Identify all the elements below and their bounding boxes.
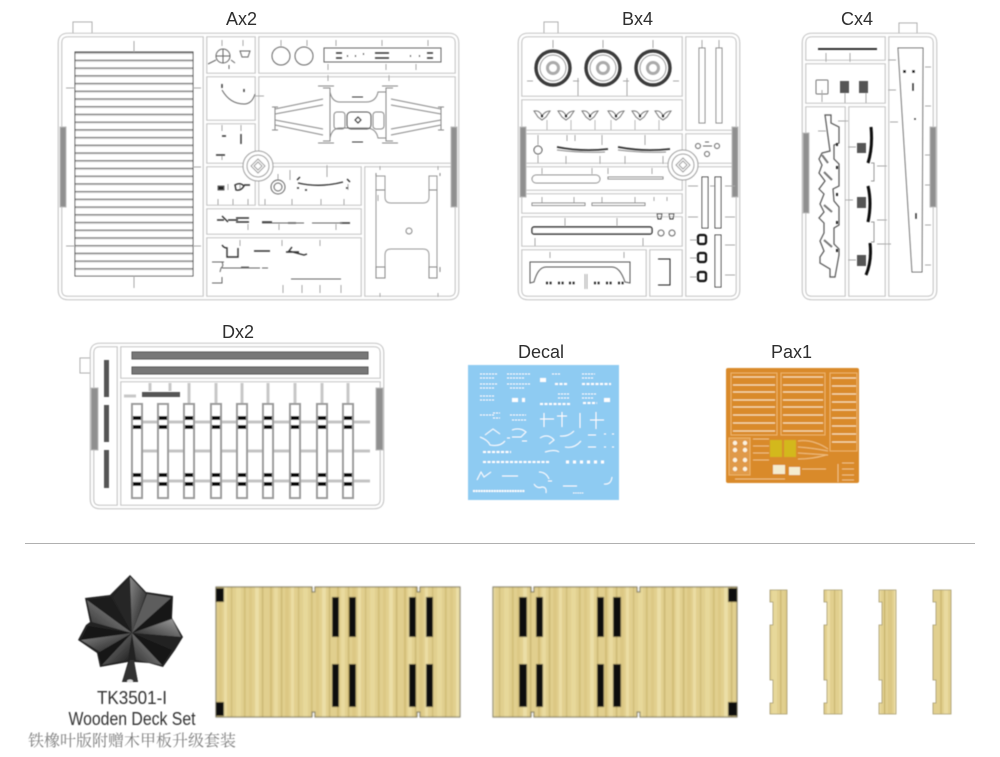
sprue B side gates — [520, 127, 738, 197]
sprue C black track links — [857, 127, 874, 275]
PE ladder rows — [731, 373, 857, 451]
sprue A runner hub — [243, 151, 273, 181]
sprue B tab — [544, 22, 558, 35]
sprue D black link joints — [133, 418, 352, 484]
panel: photo-etched sheet — [726, 368, 859, 483]
product name: Wooden Deck Set — [68, 709, 196, 729]
sprue D tab — [80, 358, 92, 373]
sprue A chassis frame — [272, 86, 444, 143]
sprue C tab — [899, 23, 917, 35]
right deck slots — [519, 597, 621, 707]
sprue C top bar part — [818, 48, 877, 50]
heading: Bx4: Bx4 — [622, 9, 653, 29]
sprue D long dark bars — [132, 352, 368, 374]
decal sheet background — [468, 365, 619, 500]
sprue B long rod parts — [532, 48, 722, 287]
sprue A runner frame — [60, 35, 457, 298]
sprue C small parts — [816, 80, 868, 94]
sprue D gates and stubs — [124, 383, 348, 403]
sprue A slatted panel — [75, 52, 193, 276]
PE hole block — [729, 438, 750, 475]
sprue C side gates — [803, 127, 936, 213]
right deck board — [493, 587, 737, 717]
sprue C wedge plate — [898, 48, 923, 272]
sprue B arched fender — [530, 259, 670, 289]
PE yellow squares — [770, 440, 796, 457]
sprue D runner frame — [92, 345, 382, 507]
sprue D vertical link frames — [132, 404, 353, 498]
Chinese product name: 铁橡叶版附赠木甲板升级套装 — [28, 732, 236, 750]
wood strip 1 — [770, 590, 787, 714]
product code: TK3501-I — [97, 688, 167, 708]
PE fret lines and small parts — [735, 439, 854, 482]
panel: sprue C parts diagram — [803, 23, 936, 298]
heading: Pax1: Pax1 — [771, 342, 812, 362]
panel: decal sheet — [468, 365, 619, 500]
sprue C running gear frame — [819, 115, 839, 277]
right deck corner blocks — [728, 588, 737, 716]
left deck board — [216, 587, 460, 717]
PE white squares — [773, 465, 800, 475]
heading: Decal: Decal — [518, 342, 564, 362]
panel: right wooden deck — [493, 587, 737, 717]
left deck slots — [332, 597, 433, 707]
product caption — [28, 688, 236, 750]
heading: Dx2: Dx2 — [222, 322, 254, 342]
heading: Cx4: Cx4 — [841, 9, 873, 29]
wood strip 4 — [933, 590, 951, 714]
sprue A hull plate — [376, 173, 440, 278]
panel: sprue D parts diagram — [80, 345, 383, 507]
wooden side strips — [770, 590, 951, 714]
sprue B butterfly parts row — [534, 111, 671, 130]
decal markings — [473, 374, 614, 493]
sprue A gates and stubs — [66, 40, 438, 297]
divider line — [25, 543, 975, 544]
sprue C gates and stubs — [818, 53, 931, 265]
PE sheet background — [726, 368, 859, 483]
sprue B gates and stubs — [527, 40, 735, 277]
sprue B road wheels — [536, 51, 670, 85]
panel: sprue A parts diagram — [60, 22, 457, 298]
sprue B small round parts — [657, 142, 720, 236]
icon: oak leaf emblem — [78, 575, 183, 682]
sprue B bracket parts — [698, 235, 706, 281]
sprue A wheel and grille details — [208, 47, 441, 283]
sprue C runner frame — [804, 35, 935, 298]
panel: sprue B parts diagram — [520, 22, 738, 298]
sprue A side gates — [60, 127, 457, 207]
left deck corner blocks — [216, 588, 224, 716]
wood strip 2 — [824, 590, 842, 714]
sprue D side gates — [91, 388, 383, 450]
sprue A tab — [73, 22, 92, 35]
sprue D cross runners — [132, 422, 370, 481]
heading: Ax2: Ax2 — [226, 9, 257, 29]
panel: left wooden deck — [216, 587, 460, 717]
sprue B runner hub — [668, 150, 698, 180]
wood strip 3 — [879, 590, 896, 714]
sprue B runner frame — [520, 35, 738, 298]
sprue D left strip parts — [104, 360, 180, 488]
